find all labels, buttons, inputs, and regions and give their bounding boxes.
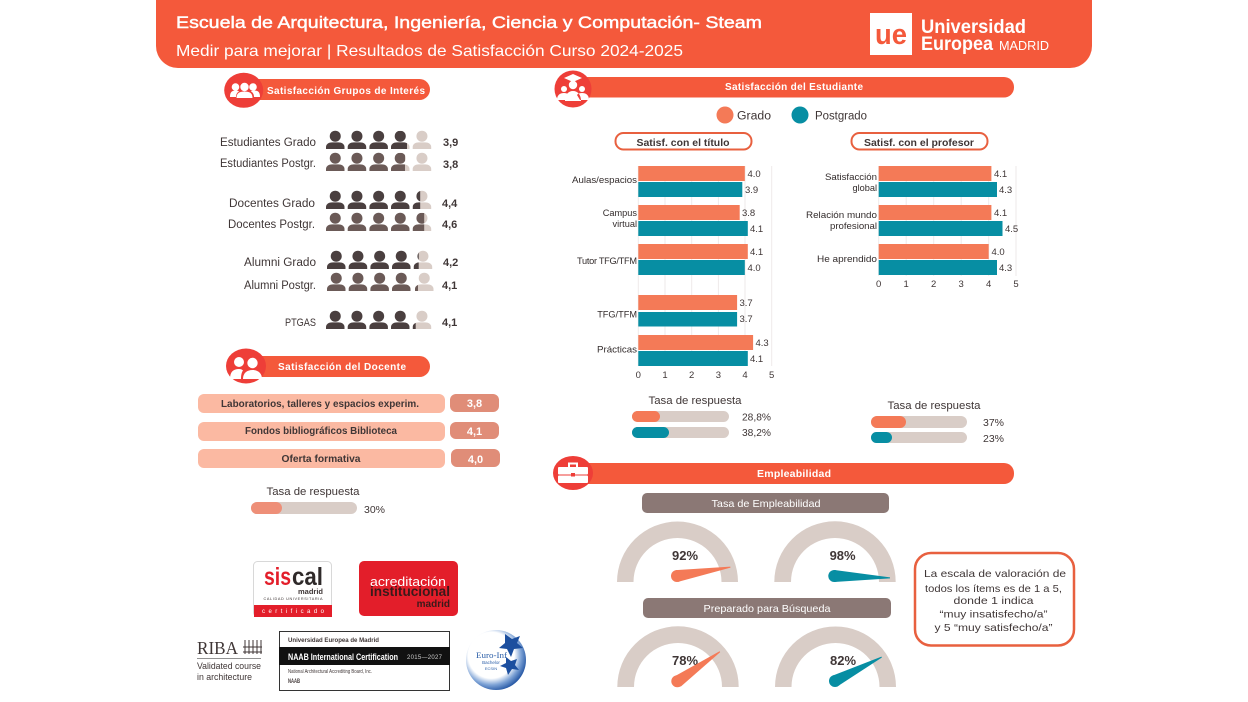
item: laboratorios: 3,8 <box>467 398 482 410</box>
bar chart: satisfacción con el título: 4.0 <box>748 263 761 274</box>
bar chart: satisfacción con el título: 4 <box>742 370 748 381</box>
row: Docentes Postgr. <box>228 213 457 231</box>
bar chart: satisfacción con el título: 0 <box>636 370 641 381</box>
row: Alumni Grado: Alumni Grado <box>244 257 316 269</box>
logo: RIBA: Validated course <box>197 661 261 672</box>
gauge: empleabilidad grado 92% <box>617 522 738 582</box>
bar chart: satisfacción con el profesor: global <box>852 183 877 193</box>
logo: Euro-Inf: ECSIN <box>485 666 497 671</box>
panel: satisfacción del docente <box>198 348 500 516</box>
row: Estudiantes Grado <box>220 131 458 149</box>
logo: NAAB: Universidad Europea de Madrid <box>288 637 379 644</box>
logo: siscal: CALIDAD UNIVERSITARIA <box>264 597 323 601</box>
callout: escala de valoración: y 5 “muy satisfecho/a” <box>934 622 1053 634</box>
chart heading: profesor: Satisf. con el profesor <box>864 137 974 149</box>
legend: Postgrado <box>815 110 867 122</box>
row: Alumni Grado: 4,2 <box>443 257 458 269</box>
item: fondos bibliográficos: Fondos bibliográficos Biblioteca <box>245 426 397 437</box>
bar chart: satisfacción con el profesor: 4.1 <box>994 169 1007 180</box>
bar chart: satisfacción con el profesor: 3 <box>959 279 964 290</box>
logo: siscal <box>254 562 332 617</box>
response rate: título: Tasa de respuesta <box>648 395 742 407</box>
heading: estudiante <box>554 70 1014 108</box>
subheading: preparado para búsqueda <box>643 598 891 618</box>
bar chart: satisfacción con el profesor: Relación mundo <box>806 210 877 220</box>
row: Alumni Postgr.: Alumni Postgr. <box>244 280 316 292</box>
item: fondos bibliográficos <box>198 422 499 441</box>
response rate: docente <box>251 486 385 516</box>
logo: acreditación institucional <box>359 561 458 616</box>
title: Escuela de Arquitectura, Ingeniería, Ciencia y Computación- Steam <box>176 13 762 32</box>
heading: docente: Satisfacción del Docente <box>278 362 406 373</box>
bar chart: satisfacción con el título: 4.3 <box>756 338 769 349</box>
callout: escala de valoración: todos los ítems es de 1 a 5, <box>925 583 1062 595</box>
chart heading: profesor <box>852 133 988 150</box>
gauge: empleabilidad postgrado 98% <box>774 521 896 582</box>
item: fondos bibliográficos: 4,1 <box>467 426 482 438</box>
row: Docentes Postgr.: 4,6 <box>442 219 457 231</box>
callout: escala de valoración: “muy insatisfecho/a” <box>940 608 1048 620</box>
logo: RIBA <box>197 638 262 683</box>
row: Docentes Grado: 4,4 <box>442 198 458 210</box>
chart heading: título: Satisf. con el título <box>636 137 730 149</box>
logo: siscal: cal <box>292 563 323 591</box>
response rate: docente: 30% <box>364 504 385 516</box>
logo: NAAB <box>279 632 450 690</box>
row: Docentes Grado: Docentes Grado <box>229 198 315 210</box>
response rate: profesor: 37% <box>983 417 1004 429</box>
row: Docentes Grado <box>229 191 458 210</box>
logo: Universidad Europea Madrid <box>870 13 1049 55</box>
response rate: título: 28,8% <box>742 412 771 424</box>
subheading: tasa de empleabilidad: Tasa de Empleabilidad <box>712 498 821 510</box>
bar chart: satisfacción con el título: Prácticas <box>597 344 637 354</box>
gauge: preparado grado 78% <box>617 626 739 687</box>
item: oferta formativa: Oferta formativa <box>282 454 361 465</box>
callout: escala de valoración: donde 1 indica <box>954 595 1034 607</box>
subtitle: Medir para mejorar | Resultados de Satisfacción Curso 2024-2025 <box>176 43 683 60</box>
bar chart: satisfacción con el título: TFG/TFM <box>597 310 637 320</box>
gauge: preparado postgrado 82% <box>775 626 896 687</box>
gauge: preparado postgrado 82%: 82% <box>830 653 856 668</box>
row: Alumni Postgr.: 4,1 <box>442 280 457 292</box>
gauge: preparado grado 78%: 78% <box>672 653 698 668</box>
row: PTGAS: 4,1 <box>442 317 457 329</box>
gauge: empleabilidad grado 92%: 92% <box>672 548 698 563</box>
bar chart: satisfacción con el título: Aulas/espacios <box>572 175 637 185</box>
bar chart: satisfacción con el profesor: 4.3 <box>999 185 1012 196</box>
logo: Universidad Europea Madrid: ue <box>875 19 907 51</box>
bar chart: satisfacción con el profesor: 1 <box>904 279 909 290</box>
heading: empleabilidad <box>553 456 1014 490</box>
callout: escala de valoración: La escala de valoración de <box>924 568 1066 580</box>
response rate: título: 38,2% <box>742 427 771 439</box>
logo: Universidad Europea Madrid: Europea <box>921 34 993 55</box>
logo: acreditación institucional: acreditación <box>370 574 446 589</box>
logo: siscal: certificado <box>262 609 325 615</box>
subheading: preparado para búsqueda: Preparado para Búsqueda <box>704 603 831 615</box>
response rate: docente: Tasa de respuesta <box>266 486 360 498</box>
header banner <box>156 0 1092 68</box>
logo: Euro-Inf: Bachelor <box>482 660 500 665</box>
logo: Universidad Europea Madrid: MADRID <box>999 38 1049 53</box>
logo: Euro-Inf: Euro-Inf <box>476 651 507 660</box>
response rate: título <box>632 395 771 439</box>
logo: Euro-Inf <box>466 630 526 690</box>
bar chart: satisfacción con el profesor: 4.1 <box>994 208 1007 219</box>
item: oferta formativa: 4,0 <box>468 454 483 466</box>
logo: NAAB: 2015—2027 <box>407 655 443 661</box>
logo: Universidad Europea Madrid: Universidad <box>921 17 1026 38</box>
item: oferta formativa <box>198 449 500 468</box>
panel: satisfacción del estudiante <box>554 70 1019 445</box>
bar chart: satisfacción con el título: 4.0 <box>748 169 761 180</box>
bar chart: satisfacción con el título: 4.1 <box>750 354 763 365</box>
logo: siscal: madrid <box>298 587 323 596</box>
bar chart: satisfacción con el título: Campus <box>603 208 637 218</box>
bar chart: satisfacción con el título: virtual <box>612 219 637 229</box>
row: Alumni Postgr. <box>244 273 457 292</box>
logo: NAAB: National Architectural Accrediting Board, Inc. <box>288 669 372 675</box>
heading: grupos de interés: Satisfacción Grupos de Interés <box>267 86 425 97</box>
bar chart: satisfacción con el profesor: profesional <box>830 221 877 231</box>
panel: empleabilidad <box>553 456 1014 687</box>
bar chart: satisfacción con el profesor: 2 <box>931 279 936 290</box>
heading: grupos de interés <box>224 73 430 108</box>
logo: acreditación institucional: madrid <box>417 599 450 610</box>
bar chart: satisfacción con el profesor: 4.3 <box>999 263 1012 274</box>
bar chart: satisfacción con el título: 3.7 <box>740 314 753 325</box>
bar chart: satisfacción con el título: 3.9 <box>745 185 758 196</box>
bar chart: satisfacción con el título: 3 <box>716 370 721 381</box>
row: Estudiantes Grado: 3,9 <box>443 137 458 149</box>
logo: siscal: sis <box>264 563 291 591</box>
logo: acreditación institucional: institucional <box>370 583 450 599</box>
logo: RIBA: in architecture <box>197 672 252 683</box>
heading: docente <box>226 348 430 384</box>
response rate: profesor <box>871 400 1004 445</box>
bar chart: satisfacción con el título: 4.1 <box>750 247 763 258</box>
row: Estudiantes Postgr. <box>220 153 458 171</box>
bar chart: satisfacción con el título: 5 <box>769 370 774 381</box>
bar chart: satisfacción con el título: 3.8 <box>742 208 755 219</box>
heading: empleabilidad: Empleabilidad <box>757 468 831 480</box>
row: Alumni Grado <box>244 251 458 269</box>
bar chart: satisfacción con el título: 1 <box>662 370 668 381</box>
row: Estudiantes Grado: Estudiantes Grado <box>220 137 316 149</box>
bar chart: satisfacción con el título: Tutor TFG/TFM <box>577 256 637 266</box>
legend: Grado <box>737 110 771 122</box>
item: laboratorios: Laboratorios, talleres y espacios experim. <box>221 399 419 410</box>
gauge: empleabilidad postgrado 98%: 98% <box>830 548 856 563</box>
item: laboratorios <box>198 394 499 413</box>
bar chart: satisfacción con el profesor: 0 <box>876 279 881 290</box>
response rate: profesor: Tasa de respuesta <box>888 400 981 412</box>
bar chart: satisfacción con el título: 3.7 <box>740 298 753 309</box>
subheading: tasa de empleabilidad <box>642 493 889 513</box>
bar chart: satisfacción con el título: 4.1 <box>750 224 763 235</box>
row: Estudiantes Postgr.: Estudiantes Postgr. <box>220 158 316 170</box>
response rate: profesor: 23% <box>983 433 1004 445</box>
logo: NAAB: NAAB <box>288 678 300 685</box>
bar chart: satisfacción con el título <box>572 166 774 381</box>
logo: NAAB: NAAB International Certification <box>288 652 398 663</box>
heading: estudiante: Satisfacción del Estudiante <box>725 82 863 93</box>
bar chart: satisfacción con el profesor: He aprendido <box>817 254 877 264</box>
bar chart: satisfacción con el profesor: 5 <box>1013 279 1019 290</box>
row: Docentes Postgr.: Docentes Postgr. <box>228 219 315 231</box>
legend <box>716 106 867 124</box>
row: Estudiantes Postgr.: 3,8 <box>443 159 458 171</box>
chart heading: título <box>616 133 752 150</box>
panel: satisfacción grupos de interés <box>220 73 458 329</box>
bar chart: satisfacción con el profesor: 4.0 <box>992 247 1005 258</box>
logo: RIBA: RIBA <box>197 638 238 658</box>
bar chart: satisfacción con el profesor <box>806 166 1019 290</box>
callout: escala de valoración <box>915 553 1074 646</box>
bar chart: satisfacción con el profesor: 4.5 <box>1005 224 1018 235</box>
bar chart: satisfacción con el profesor: 4 <box>986 279 991 290</box>
row: PTGAS <box>285 311 457 329</box>
bar chart: satisfacción con el profesor: Satisfacción <box>825 172 877 182</box>
row: PTGAS: PTGAS <box>285 317 316 329</box>
bar chart: satisfacción con el título: 2 <box>689 370 694 381</box>
